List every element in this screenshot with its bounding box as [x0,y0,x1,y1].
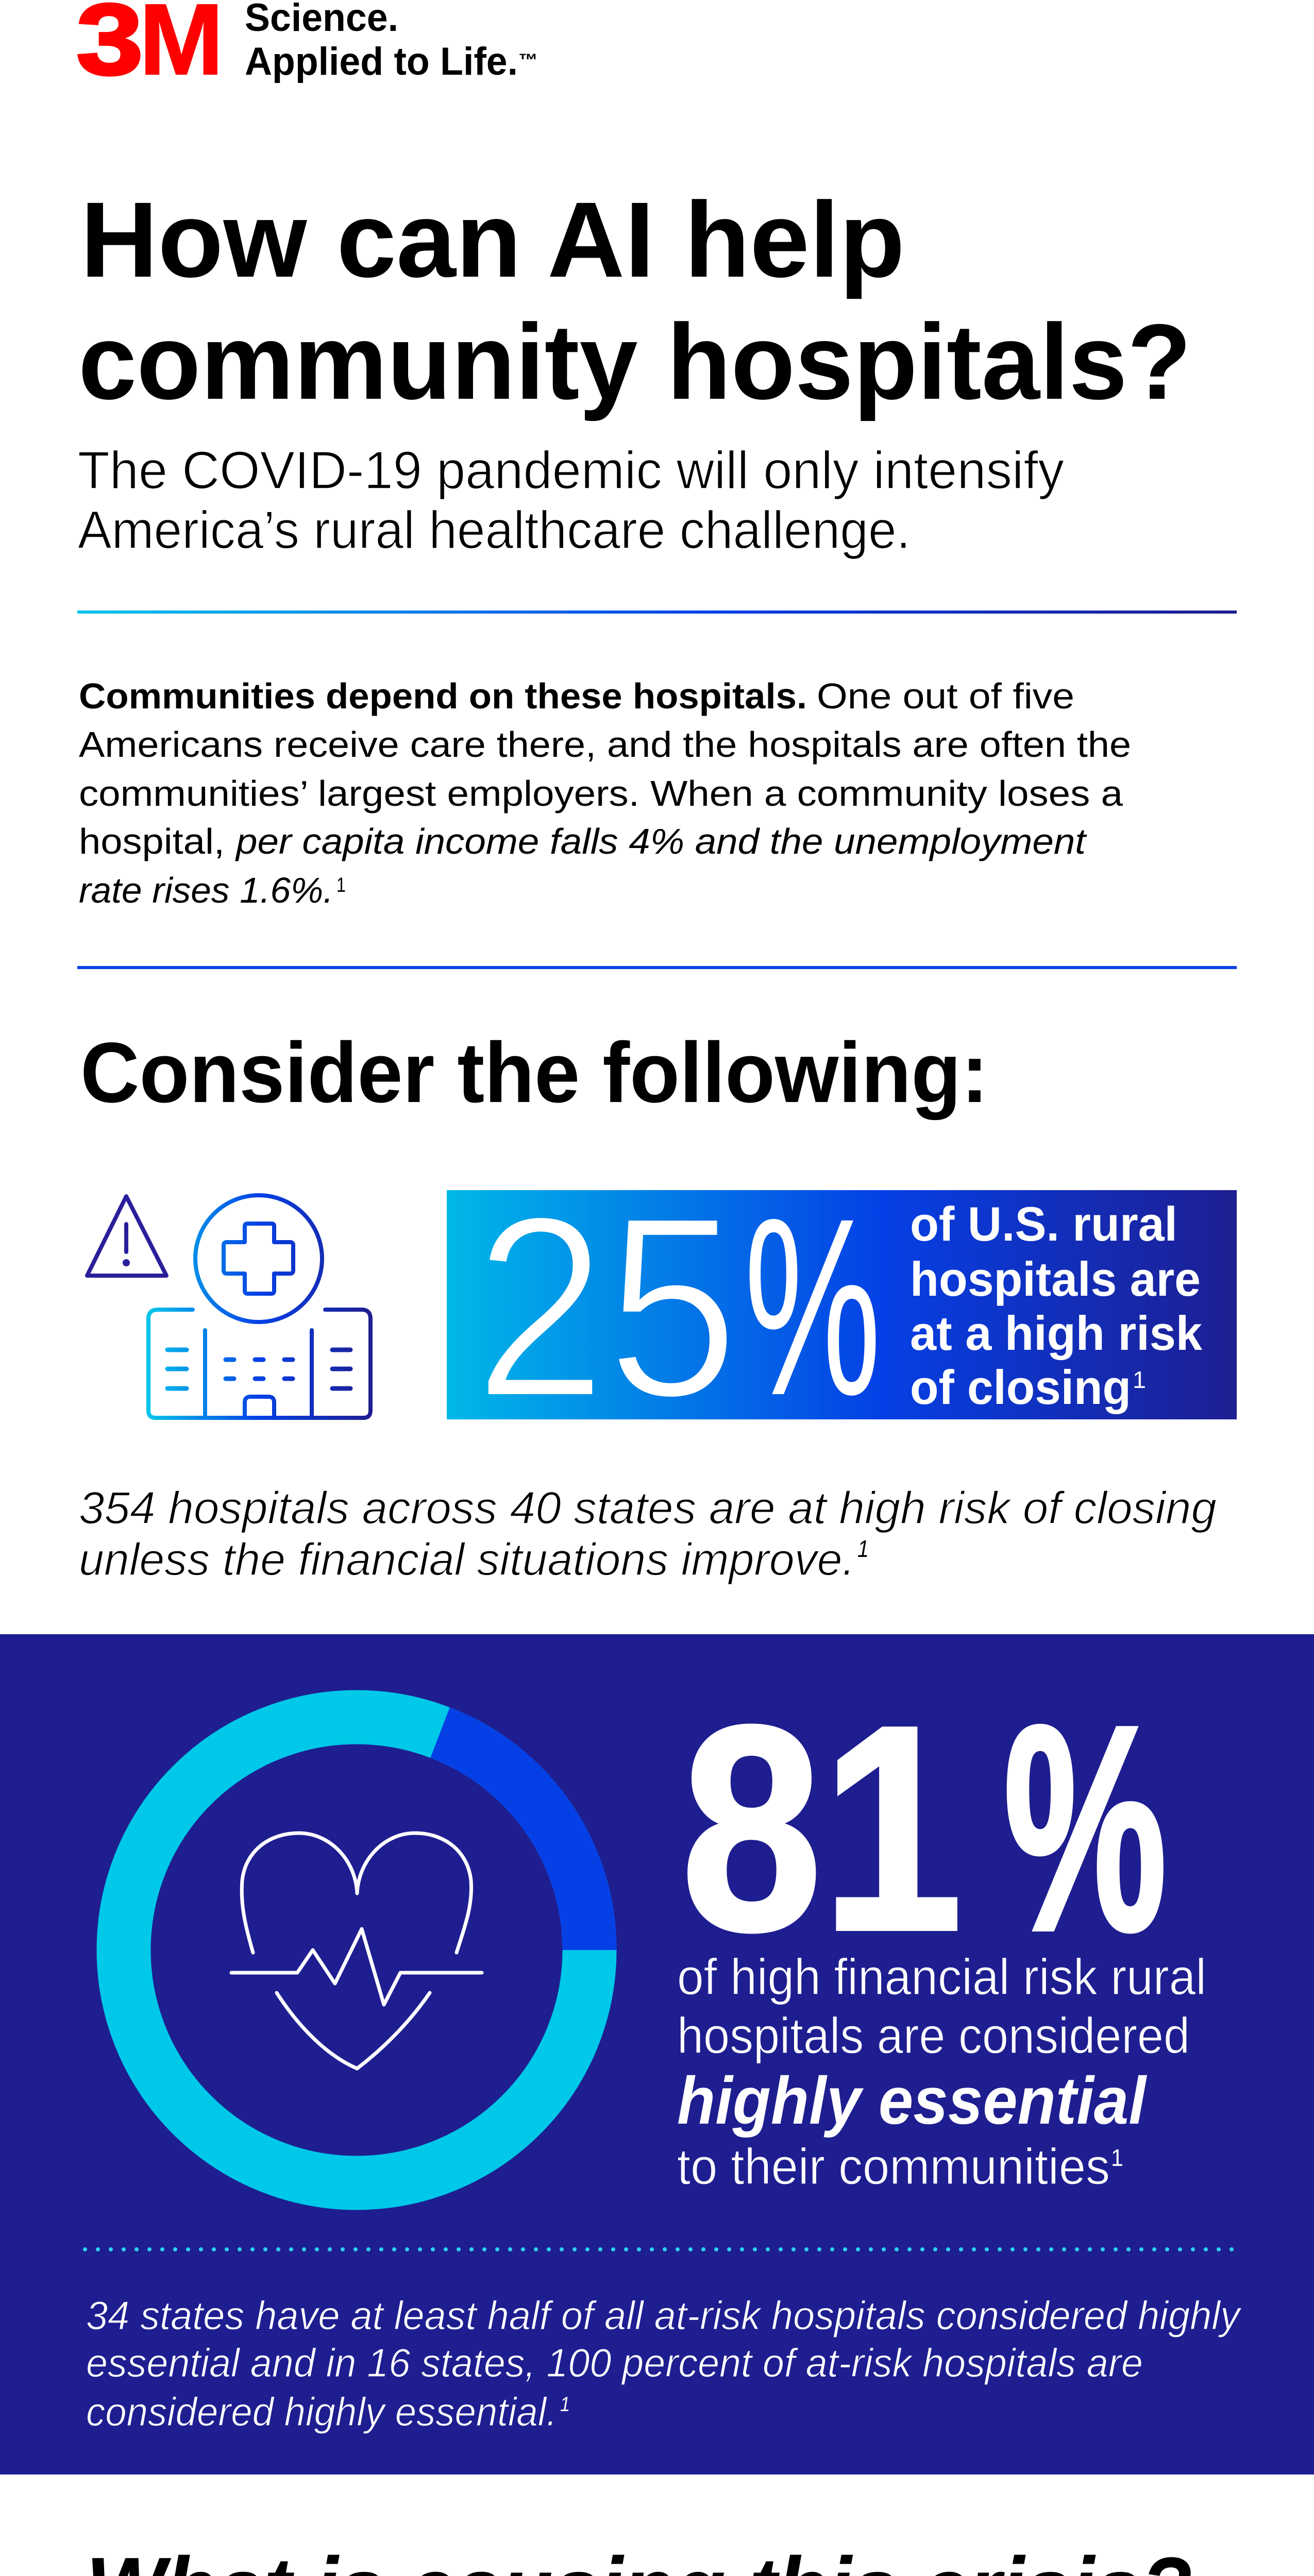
intro paragraph [79,676,1131,910]
stat description [677,1948,1206,2195]
stat description: hospitals are considered [677,2007,1190,2064]
italic note: 34 states: 1 [560,2393,570,2416]
panel: 81% highly essential [0,1634,1314,2475]
stat description: of high financial risk rural [677,1948,1206,2005]
title [78,180,1191,422]
intro paragraph: Americans receive care there, and the hospitals are often the [79,724,1131,765]
intro paragraph: rate rises 1.6%. [79,870,333,910]
logo: 3M Science. Applied to Life. [76,0,538,96]
italic note: 354 hospitals: 1 [857,1535,869,1562]
subtitle: America’s rural healthcare challenge. [78,500,911,560]
big number 81%: 81 [681,1666,963,1991]
italic note: 354 hospitals: unless the financial situations improve. [79,1534,855,1585]
logo: 3M Science. Applied to Life.: Applied to Life. [245,40,518,83]
big number 25%: % [744,1165,881,1448]
stat description: 1 [1111,2144,1123,2171]
icon: hospital building [148,1195,370,1418]
title: community hospitals? [78,302,1191,422]
italic note: 34 states: 34 states have at least half of all at-risk hospitals considered highly [86,2293,1242,2338]
italic note: 34 states: considered highly essential. [86,2389,557,2434]
intro paragraph: hospital, [79,821,225,861]
stat description: of closing [910,1360,1131,1414]
heading: consider the following: Consider the following: [80,1025,988,1121]
stat description [910,1197,1203,1414]
big number 81% [681,1666,1167,1991]
stat description: to their communities [677,2138,1110,2195]
donut chart 81% [124,1717,589,2183]
italic note: 354 hospitals: 354 hospitals across 40 states are at high risk of closing [79,1482,1217,1533]
stat description: hospitals are [910,1252,1201,1306]
intro paragraph: communities’ largest employers. When a community loses a [79,773,1123,814]
icon: heart with pulse [231,1833,482,2069]
intro paragraph: 1 [336,874,346,896]
italic note: 34 states: essential and in 16 states, 100 percent of at-risk hospitals are [86,2340,1143,2385]
stat description: 1 [1133,1366,1146,1393]
big number 25%: 25 [474,1162,739,1452]
stat description: at a high risk [910,1306,1203,1360]
intro paragraph: One out of five [817,676,1074,716]
intro paragraph: Communities depend on these hospitals. [79,676,807,716]
stat description: highly essential [677,2063,1148,2138]
subtitle: The COVID-19 pandemic will only intensify [78,440,1064,500]
italic note: 354 hospitals [79,1482,1217,1585]
italic note: 34 states [86,2293,1242,2434]
big number 81%: % [1004,1666,1167,1991]
panel: 25% stat [447,1162,1237,1452]
logo: 3M Science. Applied to Life.: ™ [518,50,538,70]
intro paragraph: per capita income falls 4% and the unemployment [235,821,1087,861]
stat description: of U.S. rural [910,1197,1177,1251]
icon: warning triangle [87,1196,166,1276]
title: How can AI help [80,180,905,300]
subtitle [78,440,1064,560]
